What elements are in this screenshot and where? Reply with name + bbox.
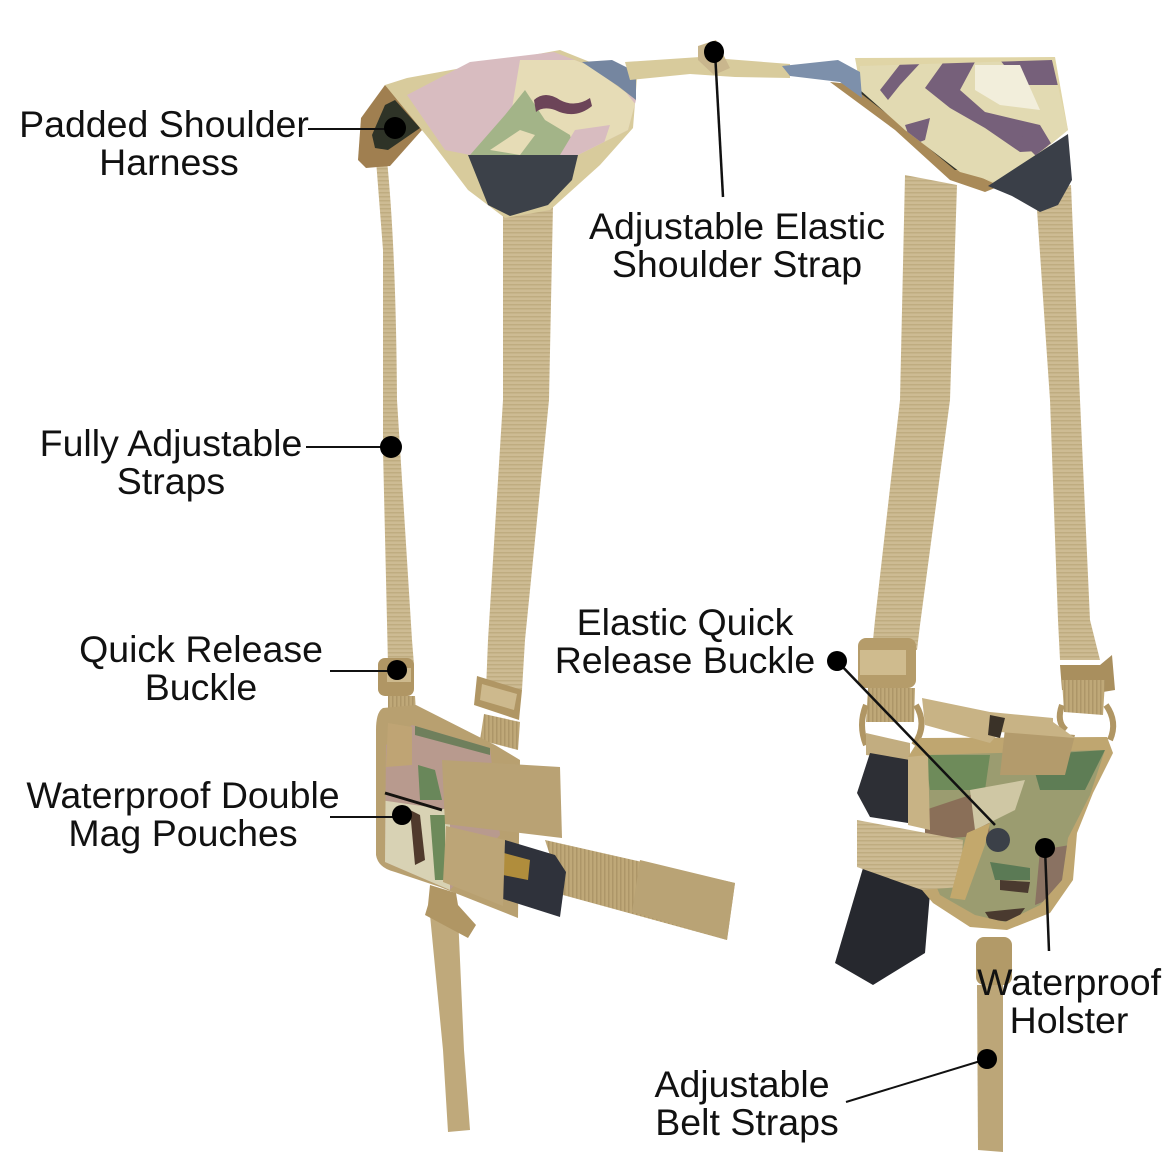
left buckle [378, 658, 414, 696]
label: adjustable elastic shoulder strap: Adjustable Elastic [589, 205, 885, 247]
left thin strap [376, 160, 414, 665]
snap button [986, 828, 1010, 852]
label: waterproof double mag pouches: Mag Pouches [68, 812, 298, 854]
label: quick release buckle: Buckle [145, 666, 257, 708]
label: padded shoulder harness: Padded Shoulder [19, 103, 309, 145]
left shoulder pad [358, 45, 640, 218]
holster [835, 638, 1115, 1152]
belt strap [545, 840, 735, 940]
upper right buckle [858, 638, 916, 688]
label: fully adjustable straps: Straps [117, 460, 225, 502]
holster camo [925, 750, 1105, 922]
holster body [908, 737, 1113, 930]
camo fabric [407, 52, 636, 155]
middle buckle [474, 676, 522, 720]
inner padded lining [358, 85, 422, 168]
left tail strap [430, 915, 470, 1132]
right outer strap [1036, 185, 1100, 660]
label: waterproof holster: Holster [1010, 999, 1128, 1041]
lower buckle [425, 885, 476, 938]
outer right buckle [1060, 655, 1115, 692]
label: adjustable belt straps [654, 1049, 997, 1143]
label: quick release buckle: Quick Release [79, 628, 323, 670]
label: adjustable belt straps: Belt Straps [655, 1101, 839, 1143]
strap below buckle [866, 688, 915, 722]
right shoulder pad [782, 55, 1075, 212]
label: quick release buckle [79, 628, 407, 708]
tan binding [385, 50, 637, 218]
label: fully adjustable straps: Fully Adjustable [40, 422, 302, 464]
lower buckle [976, 937, 1012, 985]
tan inner edge [830, 82, 1000, 192]
top roll [922, 698, 1075, 743]
outer ring [1060, 705, 1113, 740]
left wide strap [486, 205, 553, 690]
gun grip [835, 868, 930, 985]
black rubber patch [988, 134, 1072, 212]
label: elastic quick release buckle: Elastic Quick [577, 601, 794, 643]
vertical flap strip [1000, 728, 1075, 775]
belt strap tail [977, 985, 1003, 1152]
tan binding [855, 57, 1068, 186]
label: waterproof holster: Waterproof [977, 961, 1162, 1003]
small flap [386, 723, 412, 767]
ring [862, 705, 922, 745]
cartridges [503, 853, 530, 880]
left side band [908, 755, 930, 830]
label: elastic quick release buckle [555, 601, 995, 825]
left harness: mag pouches [376, 658, 735, 940]
black rubber patch [468, 155, 578, 216]
label: adjustable elastic shoulder strap: Shoulder Strap [612, 243, 862, 285]
lower left strap [388, 696, 417, 728]
back panel [376, 705, 520, 918]
camo panel [385, 725, 500, 890]
strap tab [950, 823, 990, 900]
lower pouch [443, 826, 505, 906]
camo fabric [860, 60, 1068, 182]
elastic shoulder strap with ring [625, 40, 790, 80]
right inner wide strap [872, 175, 957, 650]
label: waterproof holster [977, 838, 1162, 1041]
blue patch [782, 60, 862, 98]
label: padded shoulder harness [19, 103, 406, 183]
label: adjustable belt straps: Adjustable [654, 1063, 830, 1105]
upper flap [442, 760, 562, 838]
label: waterproof double mag pouches: Waterproof Double [26, 774, 340, 816]
retention strap [857, 820, 963, 890]
label: adjustable elastic shoulder strap [589, 41, 885, 285]
outer strap below [1062, 680, 1105, 715]
label: waterproof double mag pouches [26, 774, 412, 854]
label: fully adjustable straps [40, 422, 402, 502]
mesh lining [850, 85, 965, 170]
lower middle strap [480, 714, 520, 750]
label: elastic quick release buckle: Release Buckle [555, 639, 815, 681]
blue patch [582, 60, 636, 100]
label: padded shoulder harness: Harness [99, 141, 239, 183]
gun slide [857, 753, 910, 823]
magazine [500, 840, 566, 917]
elastic divider slit [385, 793, 442, 810]
lower strap stub [866, 733, 910, 760]
